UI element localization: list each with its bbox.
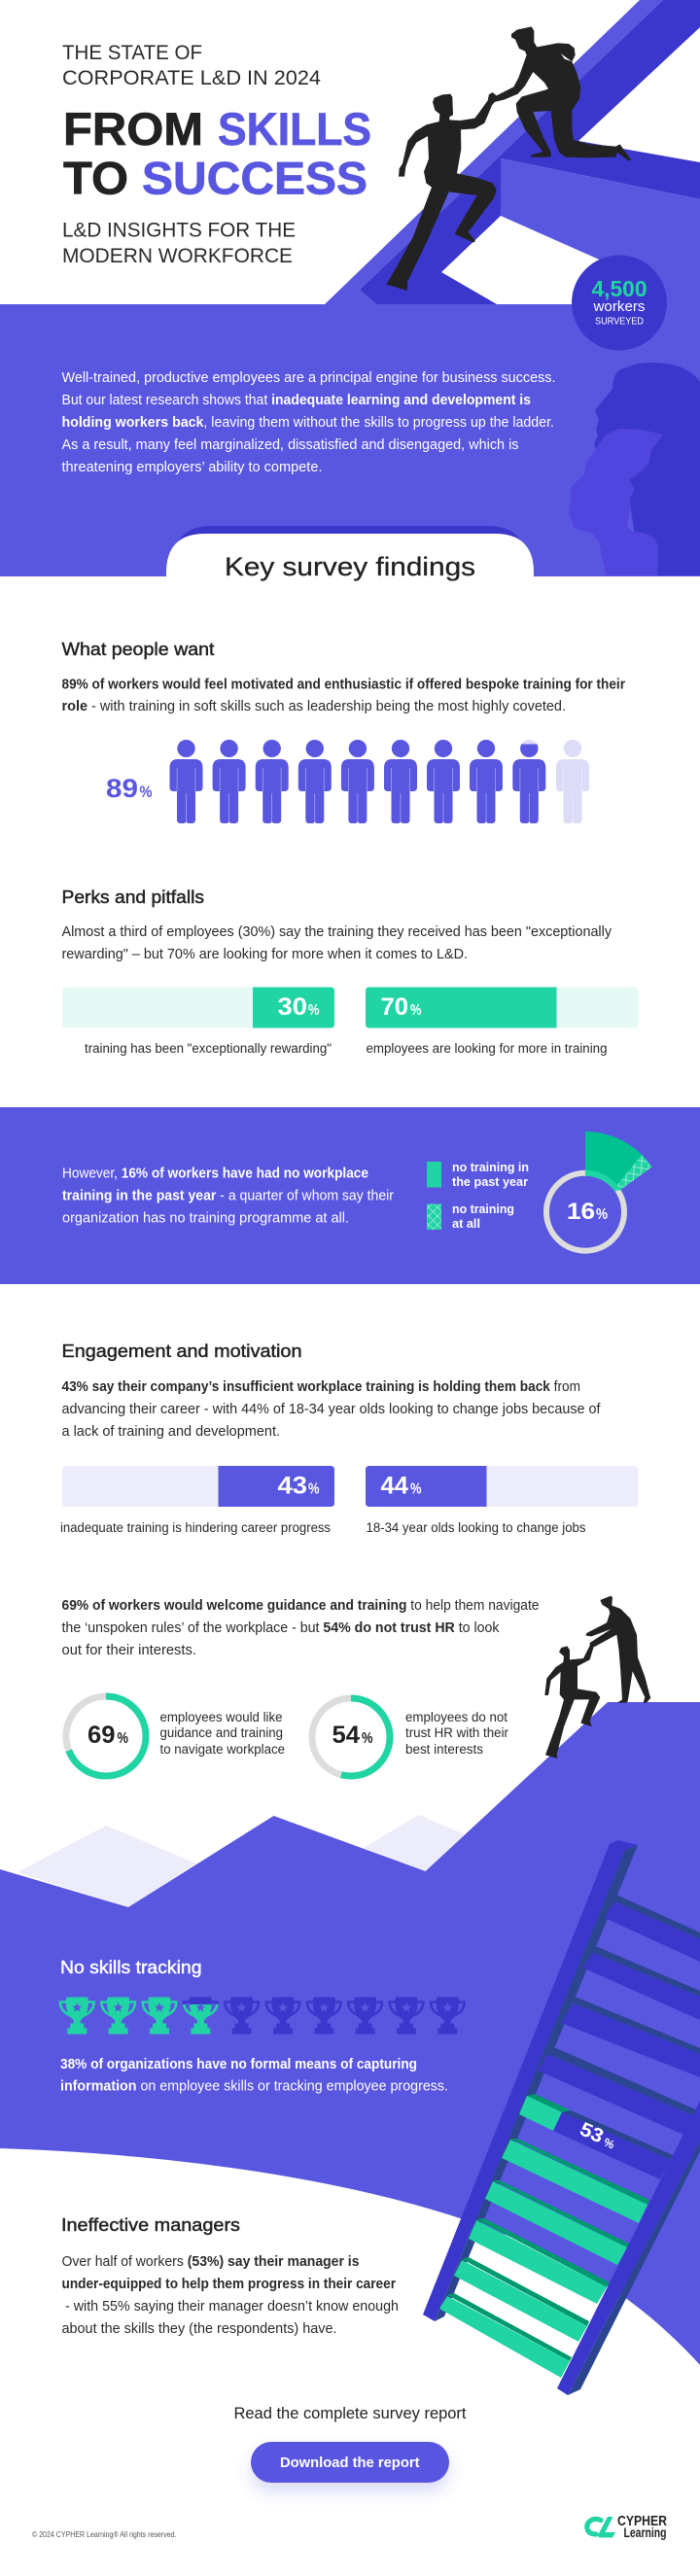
donut: 69%: 69 <box>88 1722 115 1749</box>
section: no skills tracking: information on employee skills or tracking employee progress. <box>60 2078 448 2094</box>
donut: 69%: employees would like <box>159 1710 282 1724</box>
section: perks and pitfalls: rewarding" – but 70% are looking for more when it comes to L&D. <box>62 947 468 962</box>
badge: 4,500 workers surveyed: workers <box>592 298 646 315</box>
bar: 44%: 18-34 year olds looking to change jobs <box>366 1520 586 1535</box>
call to action: Download the report <box>280 2454 420 2471</box>
intro paragraph <box>62 369 556 475</box>
section: what people want: role - with training in soft skills such as leadership being the most highly coveted. <box>62 699 566 714</box>
tab: key survey findings: Key survey findings <box>225 552 475 581</box>
donut: 54% <box>312 1698 508 1776</box>
hero kicker <box>62 42 321 89</box>
rung: 53%: % <box>602 2135 617 2152</box>
paragraph: guidance and trust: 69% of workers would welcome guidance and training to help them navigate <box>62 1598 539 1614</box>
logo: CYPHER Learning: CYPHER <box>617 2513 667 2529</box>
panel text: However, 16% of workers have had no workplace <box>62 1165 368 1182</box>
section: ineffective managers: Ineffective managers <box>61 2214 240 2235</box>
intro paragraph: holding workers back, leaving them without the skills to progress up the ladder. <box>62 414 554 431</box>
section: engagement and motivation: Engagement and motivation <box>62 1340 301 1361</box>
hero subtitle: MODERN WORKFORCE <box>62 245 293 267</box>
logo: CYPHER Learning <box>587 2513 667 2540</box>
chart: 16% ring with sector: % <box>596 1206 608 1223</box>
donut: 69% <box>66 1696 285 1776</box>
rung: 53%: 53 <box>577 2118 607 2147</box>
donut: 54%: % <box>362 1730 373 1747</box>
legend: no training <box>452 1201 514 1216</box>
bar: 70%: 70 <box>381 993 408 1021</box>
donut: 54%: best interests <box>405 1742 483 1757</box>
main title: TO <box>63 152 128 204</box>
donut: 69%: to navigate workplace <box>159 1742 285 1757</box>
section: ineffective managers: Over half of workers (53%) say their manager is <box>62 2254 360 2270</box>
bar: 30%: training has been "exceptionally rewarding" <box>85 1041 332 1056</box>
upper rungs <box>538 1894 700 2135</box>
section: perks and pitfalls <box>62 887 612 962</box>
chart: 16% ring with sector <box>546 1131 652 1251</box>
intro paragraph: threatening employers’ ability to compete. <box>62 459 323 475</box>
badge: 4,500 workers surveyed <box>572 255 667 350</box>
section: ineffective managers: under-equipped to help them progress in their career <box>62 2277 396 2292</box>
panel text <box>62 1165 394 1227</box>
bar: 43%: 43 <box>278 1472 307 1499</box>
call to action: Read the complete survey report <box>233 2404 467 2422</box>
call to action <box>233 2404 467 2483</box>
donut: 69%: % <box>117 1730 128 1747</box>
main title: FROM <box>63 103 203 155</box>
logo: CYPHER Learning: Learning <box>624 2525 667 2540</box>
donut: 54%: employees do not <box>405 1710 508 1724</box>
section: what people want <box>62 639 625 714</box>
chart: 16% ring with sector: 16 <box>567 1199 595 1225</box>
section: engagement and motivation <box>62 1340 601 1440</box>
bar: 30%: 30 <box>278 993 307 1021</box>
bar: 70%: employees are looking for more in training <box>366 1041 607 1056</box>
section: no skills tracking: No skills tracking <box>60 1957 202 1977</box>
panel text: training in the past year - a quarter of whom say their <box>62 1188 394 1203</box>
section: no skills tracking: 38% of organizations have no formal means of capturing <box>60 2057 417 2072</box>
paragraph: guidance and trust: out for their interests. <box>62 1643 196 1658</box>
bar: 44%: % <box>410 1481 422 1497</box>
stat: 89% <box>106 774 153 803</box>
bar: 30% <box>62 988 334 1056</box>
section: perks and pitfalls: Almost a third of employees (30%) say the training they received has been "exceptionally <box>62 924 612 940</box>
bar: 43%: inadequate training is hindering career progress <box>60 1520 331 1535</box>
stat: 89%: 89 <box>106 774 138 803</box>
legend <box>427 1160 529 1231</box>
donut: 54%: trust HR with their <box>405 1725 508 1740</box>
badge: 4,500 workers surveyed: SURVEYED <box>595 315 644 327</box>
hero subtitle: L&D INSIGHTS FOR THE <box>62 220 296 241</box>
donut: 54%: 54 <box>332 1722 360 1749</box>
illustration: climber being helped up <box>386 26 631 291</box>
main title: SUCCESS <box>142 152 368 204</box>
section: engagement and motivation: advancing their career - with 44% of 18-34 year olds looking to change jobs because of <box>62 1402 601 1417</box>
panel text: organization has no training programme at all. <box>62 1209 349 1227</box>
illustration: head silhouettes <box>569 363 700 575</box>
footer copyright: © 2024 CYPHER Learning® All rights reserved. <box>32 2529 177 2539</box>
hero kicker: CORPORATE L&D IN 2024 <box>62 67 321 89</box>
paragraph: guidance and trust <box>62 1598 539 1658</box>
bar: 30%: % <box>308 1002 319 1019</box>
hero kicker: THE STATE OF <box>62 42 202 64</box>
legend: the past year <box>452 1174 528 1189</box>
section: ineffective managers <box>61 2214 399 2337</box>
main title: SKILLS <box>218 103 371 155</box>
mountain: main purple slope <box>0 1702 700 2365</box>
green rungs <box>439 2139 649 2378</box>
illustration: standing man helping climber on the peak <box>544 1596 650 1758</box>
legend: no training in <box>452 1160 529 1174</box>
donut: 69%: guidance and training <box>159 1725 283 1740</box>
panel: 16% no training <box>0 1107 700 1284</box>
intro paragraph: As a result, many feel marginalized, dissatisfied and disengaged, which is <box>62 436 519 453</box>
section: ineffective managers: about the skills they (the respondents) have. <box>62 2321 336 2337</box>
badge: 4,500 workers surveyed: 4,500 <box>591 276 648 301</box>
bar: 44%: 44 <box>381 1472 408 1499</box>
bar: 70% <box>366 988 638 1056</box>
section: no skills tracking <box>60 1957 448 2094</box>
pictogram: 10 trophies, 38% filled <box>60 1998 465 2034</box>
stat: 89%: % <box>140 783 153 801</box>
section: engagement and motivation: a lack of training and development. <box>62 1424 280 1440</box>
bar: 44% <box>366 1466 638 1535</box>
pictogram: 10 people, 89% filled <box>169 740 589 823</box>
section: what people want: 89% of workers would feel motivated and enthusiastic if offered bespoke training for their <box>62 677 625 692</box>
intro paragraph: But our latest research shows that inadequate learning and development is <box>62 392 531 408</box>
paragraph: guidance and trust: the ‘unspoken rules’ of the workplace - but 54% do not trust HR to look <box>62 1620 500 1636</box>
intro paragraph: Well-trained, productive employees are a principal engine for business success. <box>62 369 556 386</box>
illustration: ladder with 53% rung <box>423 1840 700 2395</box>
rung: 53% <box>519 2094 673 2179</box>
hero subtitle <box>62 220 296 267</box>
section: what people want: What people want <box>62 639 214 659</box>
main title <box>63 103 371 204</box>
bar: 70%: % <box>410 1002 422 1019</box>
legend: at all <box>452 1216 480 1231</box>
bar: 43%: % <box>308 1481 319 1497</box>
section: engagement and motivation: 43% say their company’s insufficient workplace training is holding them back from <box>62 1379 580 1395</box>
background mountains <box>18 1815 465 1907</box>
section: perks and pitfalls: Perks and pitfalls <box>62 887 204 907</box>
bar: 43% <box>60 1466 334 1535</box>
tab: key survey findings <box>166 526 534 581</box>
section: ineffective managers: - with 55% saying their manager doesn’t know enough <box>65 2299 399 2315</box>
hero background shapes <box>0 0 700 576</box>
